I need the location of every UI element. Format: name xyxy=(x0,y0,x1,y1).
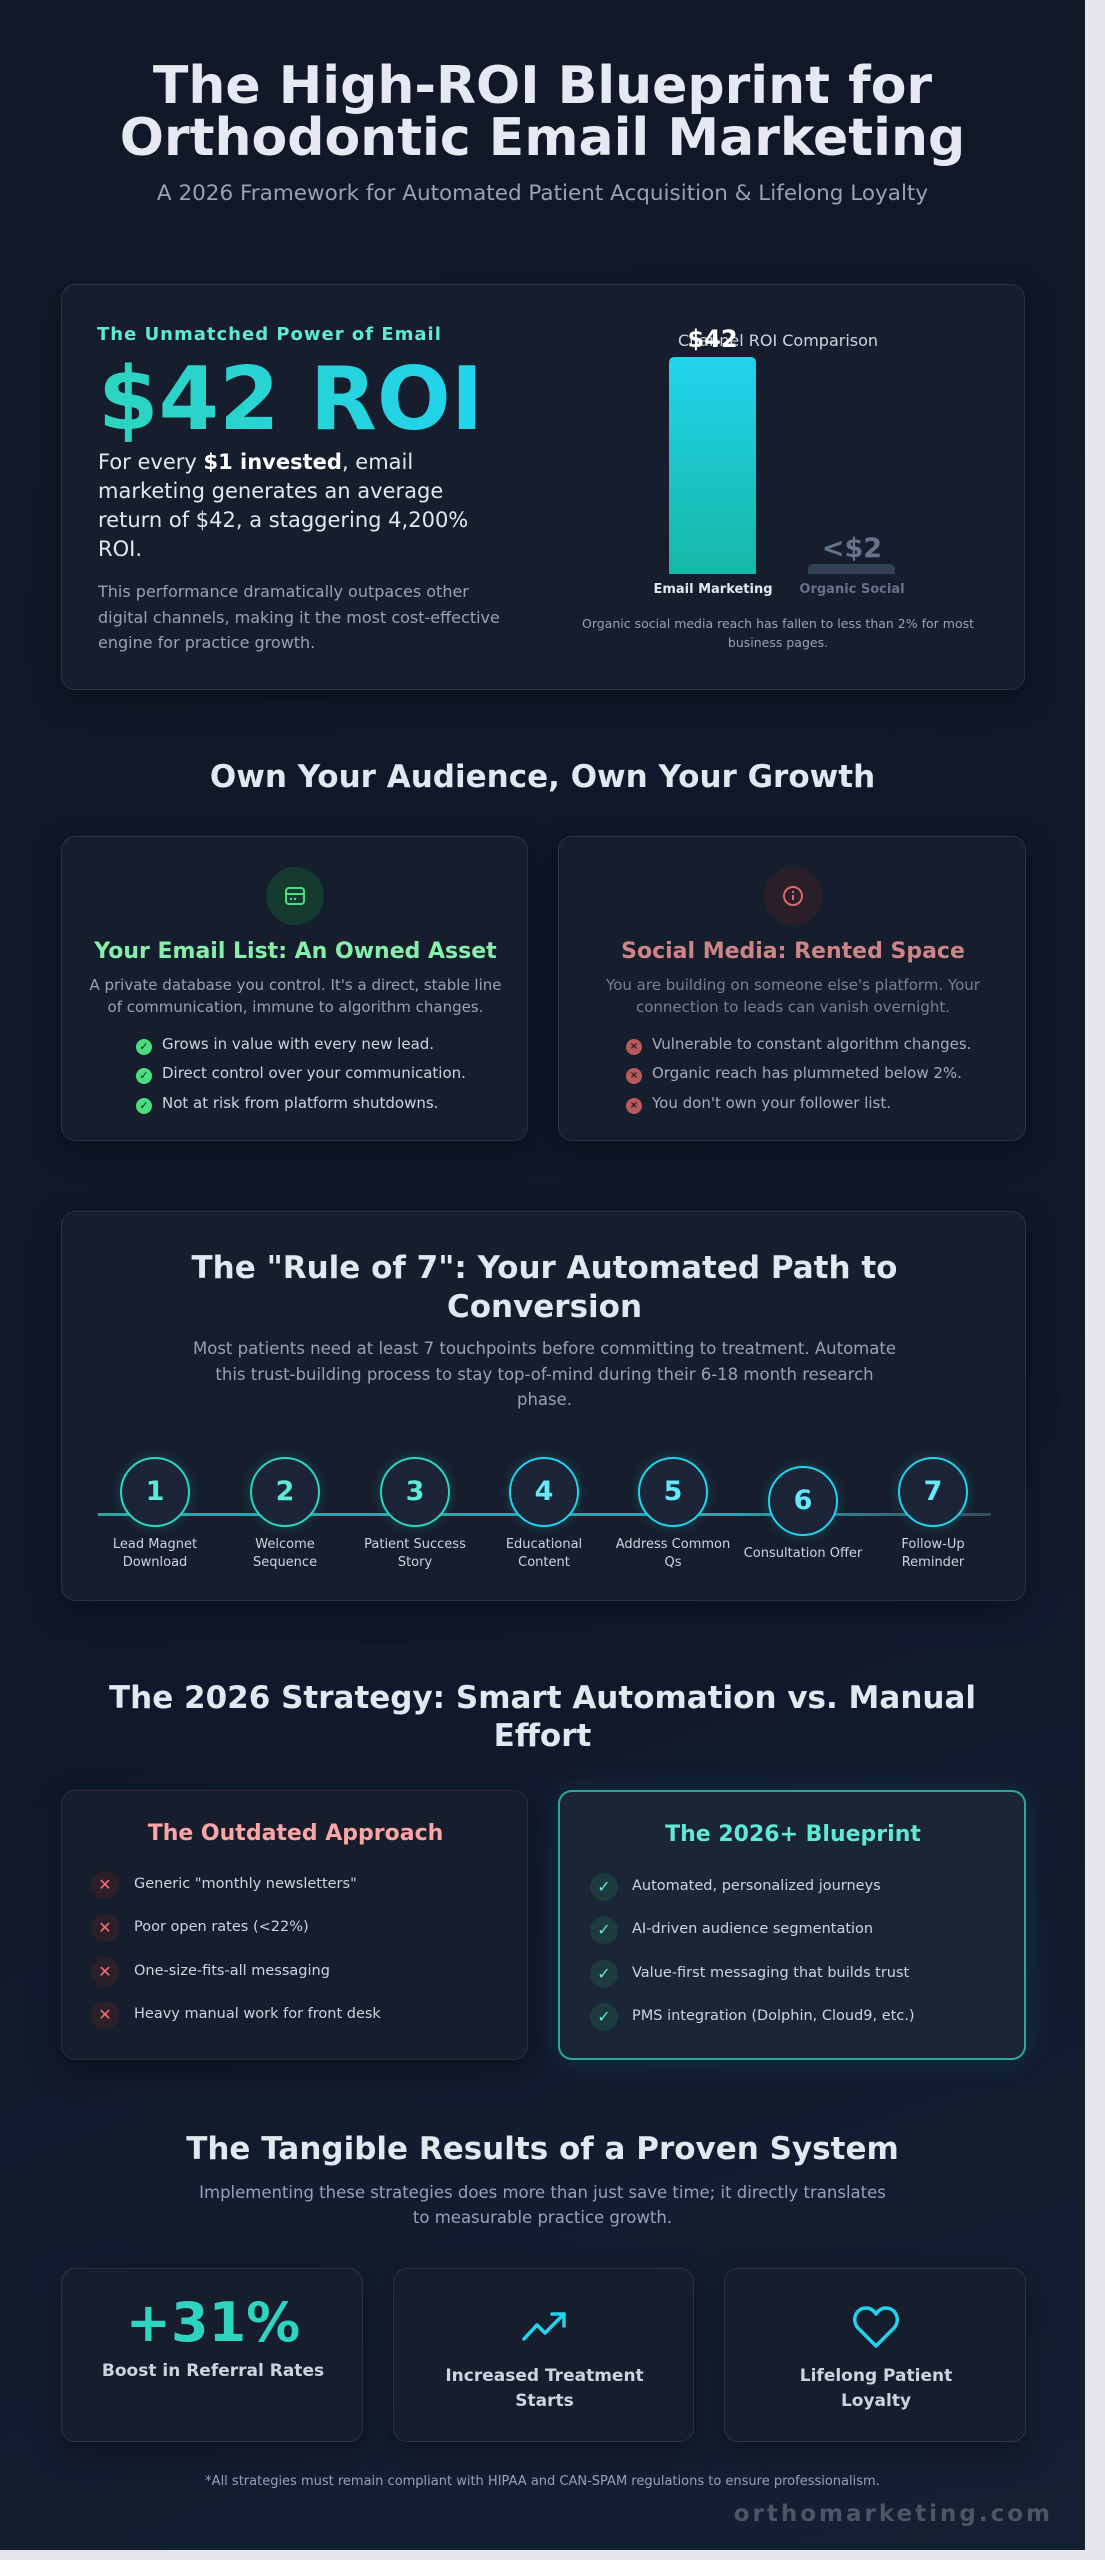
list: ✕ xyxy=(98,1875,112,1894)
subtitle: A 2026 Framework for Automated Patient Acquisition & Lifelong Loyalty xyxy=(157,181,928,206)
description: A private database you control. It's a direct, stable line of communication, immune to algorithm changes. xyxy=(89,976,502,1016)
list: ✕ xyxy=(98,1918,112,1937)
panel: email list xyxy=(61,836,528,1141)
list: Poor open rates (<22%) xyxy=(134,1919,309,1935)
description: Most patients need at least 7 touchpoints before committing to treatment. Automate this trust-building process to stay top-of-mind during their 6-18 month research phase. xyxy=(193,1339,896,1409)
icon: card xyxy=(266,867,324,925)
title xyxy=(120,56,965,168)
big stat: $42 ROI xyxy=(98,348,483,450)
list: Value-first messaging that builds trust xyxy=(632,1965,909,1981)
card title: The Outdated Approach xyxy=(148,1821,443,1846)
bullet list: Not at risk from platform shutdowns. xyxy=(162,1094,438,1112)
bullet list: × xyxy=(630,1070,638,1081)
timeline: 6 xyxy=(794,1485,812,1516)
list xyxy=(590,1873,915,2031)
icon: info xyxy=(764,867,822,925)
bullet list xyxy=(626,1035,971,1114)
card title: Your Email List: An Owned Asset xyxy=(94,939,497,964)
description: You are building on someone else's platform. Your connection to leads can vanish overnight. xyxy=(606,976,980,1016)
list: AI-driven audience segmentation xyxy=(632,1921,873,1937)
heading: own your audience: Own Your Audience, Own Your Growth xyxy=(210,759,875,795)
timeline: Educational Content xyxy=(506,1537,582,1570)
bar chart: $42 xyxy=(687,325,738,353)
list xyxy=(91,1871,381,2029)
bar chart: Organic Social xyxy=(799,582,905,597)
heading: results: The Tangible Results of a Proven System xyxy=(186,2131,899,2167)
list: ✓ xyxy=(597,2007,611,2026)
bullet list xyxy=(136,1035,466,1114)
timeline: 4 xyxy=(535,1476,553,1507)
title: The High-ROI Blueprint for xyxy=(153,56,932,116)
panel: rule of 7 xyxy=(61,1211,1026,1601)
bullet list: ✓ xyxy=(139,1069,149,1082)
stat card: treatment starts: Increased Treatment xyxy=(445,2366,644,2386)
list: ✓ xyxy=(597,1877,611,1896)
card title: Social Media: Rented Space xyxy=(621,939,965,964)
bullet list: × xyxy=(630,1100,638,1111)
list: One-size-fits-all messaging xyxy=(134,1963,330,1979)
panel: ROI xyxy=(61,284,1025,690)
timeline xyxy=(98,1454,991,1570)
list: Heavy manual work for front desk xyxy=(134,2006,381,2022)
bar chart: Organic social media reach has fallen to less than 2% for most business pages. xyxy=(582,616,974,650)
title: Orthodontic Email Marketing xyxy=(120,108,965,168)
bullet list: ✓ xyxy=(139,1099,149,1112)
bullet list: Grows in value with every new lead. xyxy=(162,1035,434,1053)
stat card: referrals: Boost in Referral Rates xyxy=(102,2361,324,2381)
timeline: Welcome Sequence xyxy=(253,1537,317,1570)
bullet list: Organic reach has plummeted below 2%. xyxy=(652,1064,962,1082)
timeline: Consultation Offer xyxy=(744,1546,862,1561)
stat card: loyalty xyxy=(724,2268,1026,2442)
stat card: referrals: +31% xyxy=(126,2291,300,2354)
card title: The 2026+ Blueprint xyxy=(665,1822,921,1847)
list: ✓ xyxy=(597,1920,611,1939)
timeline: 7 xyxy=(924,1476,942,1507)
watermark: orthomarketing.com xyxy=(734,2501,1053,2527)
timeline: 5 xyxy=(664,1476,682,1507)
heading: strategy: The 2026 Strategy: Smart Automation vs. Manual Effort xyxy=(109,1680,976,1754)
bullet list: You don't own your follower list. xyxy=(652,1094,891,1112)
list: ✕ xyxy=(98,2005,112,2024)
bullet list: × xyxy=(630,1041,638,1052)
text block: This performance dramatically outpaces other digital channels, making it the most cost-effective engine for practice growth. xyxy=(98,582,500,652)
list: ✕ xyxy=(98,1962,112,1981)
timeline: Address Common Qs xyxy=(616,1537,730,1570)
timeline: Lead Magnet Download xyxy=(113,1537,197,1570)
bar chart: <$2 xyxy=(822,533,882,564)
bar chart xyxy=(582,325,974,650)
bullet list: Direct control over your communication. xyxy=(162,1064,466,1082)
timeline: 2 xyxy=(276,1476,294,1507)
bar chart: Email Marketing xyxy=(653,582,773,597)
panel: 2026 blueprint xyxy=(558,1790,1026,2060)
results description: Implementing these strategies does more than just save time; it directly translates to measurable practice growth. xyxy=(199,2183,886,2227)
icon: trend arrow xyxy=(522,2312,566,2341)
list: Generic "monthly newsletters" xyxy=(134,1876,357,1892)
list: Automated, personalized journeys xyxy=(632,1878,881,1894)
stat card: referrals xyxy=(61,2268,363,2442)
stat card: loyalty: Lifelong Patient xyxy=(800,2366,952,2386)
footnote: *All strategies must remain compliant with HIPAA and CAN-SPAM regulations to ensure professionalism. xyxy=(205,2474,880,2489)
bullet list: ✓ xyxy=(139,1040,149,1053)
bullet list: Vulnerable to constant algorithm changes. xyxy=(652,1035,971,1053)
panel: social media xyxy=(558,836,1026,1141)
list: ✓ xyxy=(597,1964,611,1983)
icon: heart xyxy=(853,2306,899,2348)
panel: outdated approach xyxy=(61,1790,528,2060)
timeline: Follow-Up Reminder xyxy=(901,1537,965,1570)
stat card: loyalty: Loyalty xyxy=(841,2391,911,2411)
timeline: 1 xyxy=(146,1476,164,1507)
text block: For every $1 invested, email marketing generates an average return of $42, a staggering 4,200% ROI. xyxy=(98,450,468,561)
timeline: 3 xyxy=(406,1476,424,1507)
eyebrow heading: The Unmatched Power of Email xyxy=(97,324,442,345)
heading: The "Rule of 7": Your Automated Path to Conversion xyxy=(192,1250,897,1325)
list: PMS integration (Dolphin, Cloud9, etc.) xyxy=(632,2008,915,2024)
timeline: Patient Success Story xyxy=(364,1537,466,1570)
bar chart: Channel ROI Comparison xyxy=(678,331,878,350)
stat card: treatment starts xyxy=(393,2268,694,2442)
stat card: treatment starts: Starts xyxy=(515,2391,574,2411)
